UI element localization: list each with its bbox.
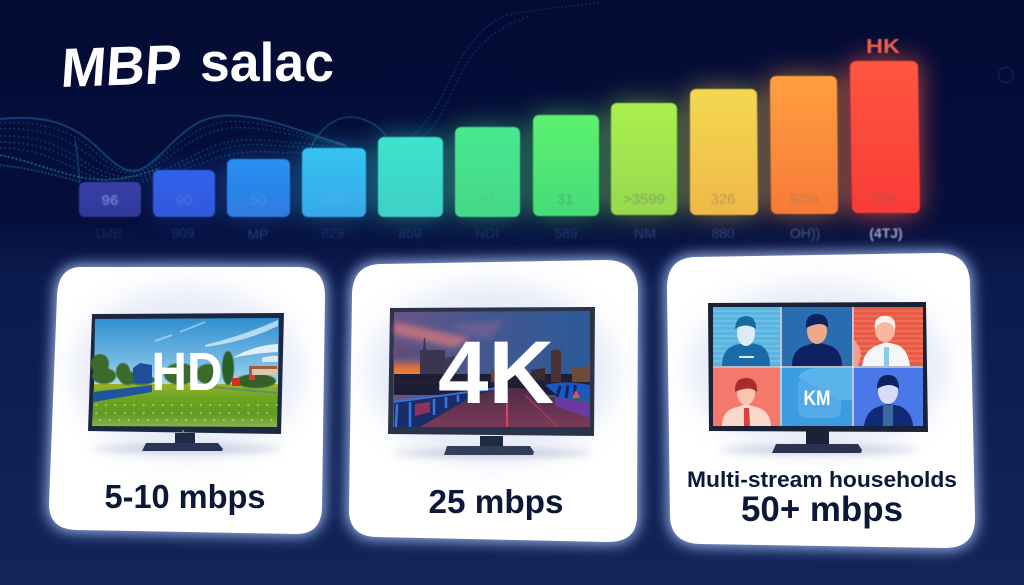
- bar value labels: 91: [479, 191, 495, 208]
- monitor: multi-stream: [708, 302, 928, 453]
- sky streaks: [394, 320, 505, 358]
- tile dividers: [713, 307, 923, 426]
- bar axis labels: 589: [554, 225, 578, 241]
- bar chart: [79, 36, 920, 242]
- bar glow: [153, 61, 919, 217]
- title word MBP: MBP: [59, 33, 183, 99]
- tile 1: [713, 307, 780, 366]
- tile 6: [854, 368, 923, 426]
- bar axis labels: 880: [711, 225, 735, 241]
- tile logo: KM: [804, 387, 830, 410]
- screen city at dusk: [393, 311, 590, 427]
- bar value labels: 96: [102, 192, 118, 209]
- video call grid: [713, 307, 923, 426]
- tile 3: [854, 307, 923, 366]
- card glow: [667, 253, 975, 548]
- bar value labels: 90: [176, 192, 192, 209]
- monitor: 4K: [388, 307, 595, 455]
- bar axis labels: 859: [398, 225, 422, 241]
- tree line: [91, 351, 276, 388]
- bar axis labels: MP: [248, 226, 268, 242]
- bar axis labels: [94, 225, 903, 242]
- HD label: HD: [152, 342, 222, 402]
- speed: 25 mbps: 25 mbps: [428, 483, 564, 520]
- 4K label: 4K: [438, 322, 554, 422]
- top bar label: HK: [866, 36, 901, 58]
- bar value labels: D2k: [872, 189, 897, 205]
- bar axis labels: 829: [321, 225, 345, 241]
- card glow: [349, 260, 638, 542]
- tile 2: [782, 307, 852, 366]
- wave mesh: [0, 3, 600, 183]
- card body: [349, 260, 638, 542]
- tile 5: [782, 368, 852, 426]
- bar value labels: 31: [557, 191, 573, 208]
- bar value labels: 50: [250, 192, 266, 209]
- tile 4: [713, 368, 780, 426]
- decorative circle: [998, 68, 1014, 82]
- bar value labels: >3599: [623, 191, 665, 208]
- card body: [667, 253, 975, 548]
- panel: multi-stream: [667, 253, 975, 548]
- title word salac: salac: [200, 31, 334, 93]
- label: multi-stream households: Multi-stream households: [687, 467, 957, 492]
- bar axis labels: NDI: [475, 225, 499, 241]
- panel: 4K: [349, 260, 638, 542]
- bar value labels: 326: [710, 191, 736, 208]
- bar value labels: 363: [321, 192, 347, 209]
- bar value labels: 41: [402, 191, 418, 208]
- bar axis labels: (4TJ): [869, 225, 903, 241]
- monitor shadow: [718, 446, 918, 454]
- bar value labels: [102, 189, 897, 209]
- speed: 50+ mbps: 50+ mbps: [741, 490, 903, 529]
- bar axis labels: NM: [634, 225, 656, 241]
- bar value labels: 929x: [789, 190, 819, 206]
- bar axis labels: 1MB: [94, 225, 122, 241]
- bar axis labels: 909: [171, 225, 195, 241]
- screen landscape: [91, 318, 279, 427]
- monitor: HD: [88, 313, 284, 451]
- card body: [49, 267, 325, 534]
- bars: [79, 61, 920, 217]
- speed: 5-10 mbps: 5-10 mbps: [104, 478, 266, 515]
- monitor shadow: [92, 445, 282, 453]
- bar axis labels: OH)): [790, 225, 820, 241]
- card glow: [49, 267, 325, 534]
- monitor shadow: [393, 449, 593, 457]
- panel: HD: [49, 267, 325, 534]
